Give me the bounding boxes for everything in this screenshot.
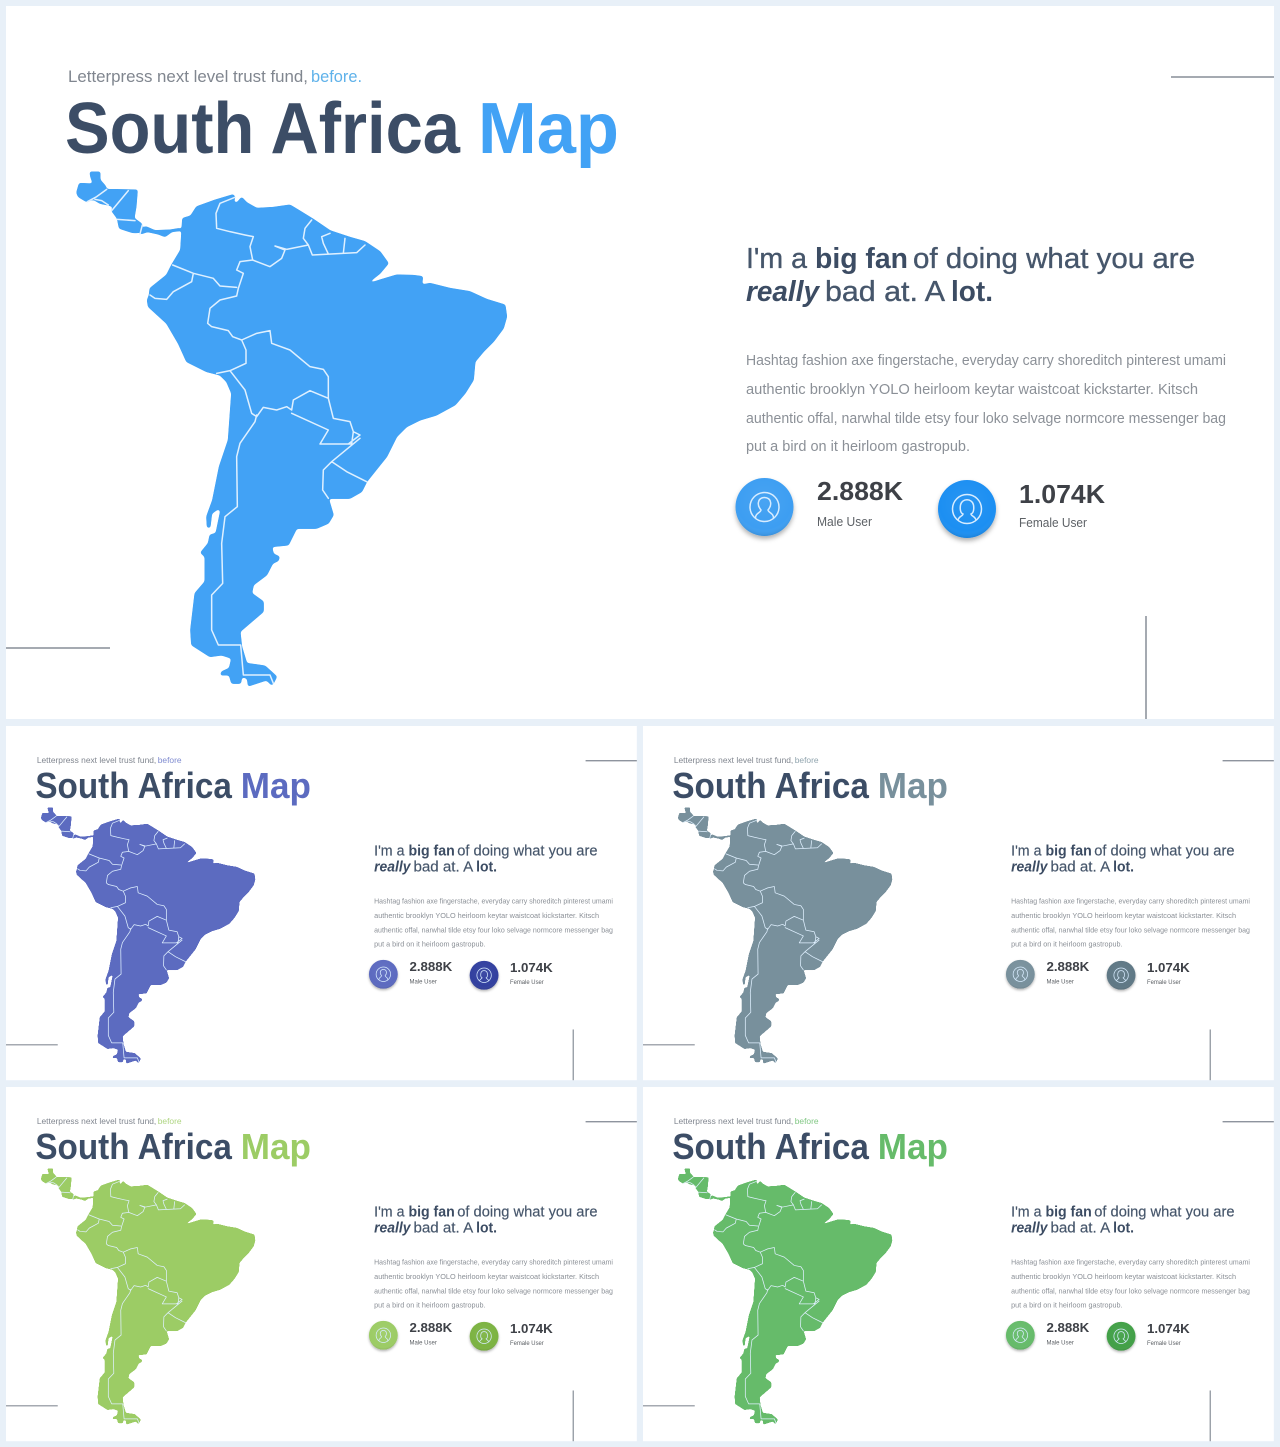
stat: male user: 2.888K	[409, 1320, 453, 1335]
stat: female user: Female User	[510, 979, 544, 986]
heading: of doing what you are	[1094, 843, 1235, 859]
icon: male user	[369, 1321, 398, 1350]
heading	[1011, 843, 1235, 876]
heading: lot.	[1113, 860, 1134, 876]
icon: male user	[736, 478, 794, 536]
eyebrow text: before	[158, 755, 182, 765]
stat: male user	[1046, 959, 1090, 986]
icon: female user	[470, 1322, 499, 1351]
body text: authentic brooklyn YOLO heirloom keytar waistcoat kickstarter. Kitsch	[1011, 1272, 1236, 1281]
title: South Africa	[672, 766, 870, 806]
stat: male user: 2.888K	[409, 959, 453, 974]
icon: male user	[1006, 1321, 1035, 1350]
heading: bad at. A	[413, 860, 474, 876]
title: South Africa	[35, 1127, 233, 1167]
eyebrow text: Letterpress next level trust fund,	[37, 755, 156, 765]
heading: I'm a	[746, 243, 808, 275]
title: Map	[241, 1127, 311, 1167]
heading	[1011, 1204, 1235, 1237]
heading: lot.	[1113, 1221, 1134, 1237]
stat: female user	[1147, 960, 1190, 986]
eyebrow text: before	[795, 1116, 819, 1126]
title: Map	[478, 89, 619, 169]
map	[678, 808, 892, 1063]
icon: female user	[1107, 1322, 1136, 1351]
stat: male user: Male User	[409, 979, 437, 986]
title: Map	[878, 1127, 948, 1167]
icon: female user	[938, 480, 996, 538]
heading: big fan	[1045, 843, 1092, 859]
body text: put a bird on it heirloom gastropub.	[1011, 939, 1123, 948]
stat: female user: 1.074K	[1147, 960, 1190, 975]
heading: really	[1011, 1221, 1048, 1237]
stat: female user: Female User	[1147, 1340, 1181, 1347]
heading: lot.	[951, 276, 993, 308]
body text: Hashtag fashion axe fingerstache, everyday carry shoreditch pinterest umami	[374, 897, 613, 906]
body text: authentic offal, narwhal tilde etsy four loko selvage normcore messenger bag	[746, 410, 1226, 427]
map	[41, 808, 255, 1063]
heading: lot.	[476, 1221, 497, 1237]
eyebrow text: before	[158, 1116, 182, 1126]
heading: I'm a	[1011, 843, 1042, 859]
body text	[1011, 897, 1250, 948]
slide: purple panel	[6, 726, 637, 1080]
heading: lot.	[476, 860, 497, 876]
eyebrow text: Letterpress next level trust fund,	[37, 1116, 156, 1126]
stat: female user	[1019, 479, 1105, 530]
heading: big fan	[408, 1204, 455, 1220]
body text: authentic offal, narwhal tilde etsy four loko selvage normcore messenger bag	[1011, 925, 1250, 934]
stat: female user: 1.074K	[1147, 1321, 1190, 1336]
stat: female user: Female User	[1147, 979, 1181, 986]
heading: of doing what you are	[913, 243, 1195, 275]
body text: put a bird on it heirloom gastropub.	[1011, 1300, 1123, 1309]
heading	[746, 243, 1195, 308]
heading: bad at. A	[1050, 860, 1111, 876]
slide: green panel	[643, 1087, 1274, 1441]
heading: really	[374, 860, 411, 876]
map	[678, 1169, 892, 1424]
body text: Hashtag fashion axe fingerstache, everyday carry shoreditch pinterest umami	[1011, 897, 1250, 906]
body text: authentic offal, narwhal tilde etsy four loko selvage normcore messenger bag	[374, 925, 613, 934]
stat: male user: Male User	[1046, 979, 1074, 986]
eyebrow text: Letterpress next level trust fund,	[674, 1116, 793, 1126]
slide: light green panel	[6, 1087, 637, 1441]
title: South Africa	[35, 766, 233, 806]
heading: bad at. A	[825, 276, 946, 308]
stat: female user	[510, 1321, 553, 1347]
title: Map	[241, 766, 311, 806]
stat: male user	[409, 959, 453, 986]
heading: really	[374, 1221, 411, 1237]
stat: male user	[409, 1320, 453, 1347]
icon: female user	[470, 961, 499, 990]
stat: female user	[510, 960, 553, 986]
heading: I'm a	[374, 843, 405, 859]
heading: of doing what you are	[457, 1204, 598, 1220]
stat: male user: Male User	[1046, 1340, 1074, 1347]
heading	[374, 843, 598, 876]
stat: male user: 2.888K	[1046, 959, 1090, 974]
heading	[374, 1204, 598, 1237]
title: Map	[878, 766, 948, 806]
heading: really	[1011, 860, 1048, 876]
stat: female user: 1.074K	[510, 960, 553, 975]
body text: put a bird on it heirloom gastropub.	[374, 1300, 486, 1309]
body text: Hashtag fashion axe fingerstache, everyday carry shoreditch pinterest umami	[1011, 1258, 1250, 1267]
stat: male user: Male User	[409, 1340, 437, 1347]
heading: of doing what you are	[1094, 1204, 1235, 1220]
heading: I'm a	[1011, 1204, 1042, 1220]
title: South Africa	[672, 1127, 870, 1167]
body text	[1011, 1258, 1250, 1309]
slide: blue main panel	[6, 6, 1274, 719]
heading: bad at. A	[1050, 1221, 1111, 1237]
stat: female user: 1.074K	[1019, 479, 1105, 509]
body text: authentic brooklyn YOLO heirloom keytar waistcoat kickstarter. Kitsch	[746, 381, 1198, 398]
map	[41, 1169, 255, 1424]
slide: slate panel	[643, 726, 1274, 1080]
heading: big fan	[1045, 1204, 1092, 1220]
stat: male user: 2.888K	[817, 476, 903, 506]
eyebrow text: before	[795, 755, 819, 765]
eyebrow text: Letterpress next level trust fund,	[68, 67, 308, 86]
icon: male user	[1006, 960, 1035, 989]
body text	[374, 897, 613, 948]
body text: authentic brooklyn YOLO heirloom keytar waistcoat kickstarter. Kitsch	[1011, 911, 1236, 920]
icon: male user	[369, 960, 398, 989]
stat: female user: Female User	[510, 1340, 544, 1347]
map	[77, 172, 507, 686]
eyebrow text: before.	[311, 67, 362, 86]
heading: bad at. A	[413, 1221, 474, 1237]
stat: female user: 1.074K	[510, 1321, 553, 1336]
stat: male user: 2.888K	[1046, 1320, 1090, 1335]
body text: put a bird on it heirloom gastropub.	[374, 939, 486, 948]
icon: female user	[1107, 961, 1136, 990]
body text: Hashtag fashion axe fingerstache, everyday carry shoreditch pinterest umami	[374, 1258, 613, 1267]
body text	[374, 1258, 613, 1309]
body text: authentic offal, narwhal tilde etsy four loko selvage normcore messenger bag	[1011, 1286, 1250, 1295]
body text: Hashtag fashion axe fingerstache, everyday carry shoreditch pinterest umami	[746, 352, 1226, 369]
heading: I'm a	[374, 1204, 405, 1220]
heading: big fan	[408, 843, 455, 859]
eyebrow text: Letterpress next level trust fund,	[674, 755, 793, 765]
stat: male user	[817, 476, 903, 529]
title: South Africa	[65, 89, 461, 169]
body text: authentic offal, narwhal tilde etsy four loko selvage normcore messenger bag	[374, 1286, 613, 1295]
stat: female user	[1147, 1321, 1190, 1347]
stat: male user: Male User	[817, 515, 872, 529]
heading: really	[746, 276, 821, 308]
heading: big fan	[815, 243, 908, 275]
stat: male user	[1046, 1320, 1090, 1347]
heading: of doing what you are	[457, 843, 598, 859]
body text: authentic brooklyn YOLO heirloom keytar waistcoat kickstarter. Kitsch	[374, 1272, 599, 1281]
body text: authentic brooklyn YOLO heirloom keytar waistcoat kickstarter. Kitsch	[374, 911, 599, 920]
body text	[746, 352, 1226, 455]
body text: put a bird on it heirloom gastropub.	[746, 438, 970, 455]
stat: female user: Female User	[1019, 516, 1087, 530]
